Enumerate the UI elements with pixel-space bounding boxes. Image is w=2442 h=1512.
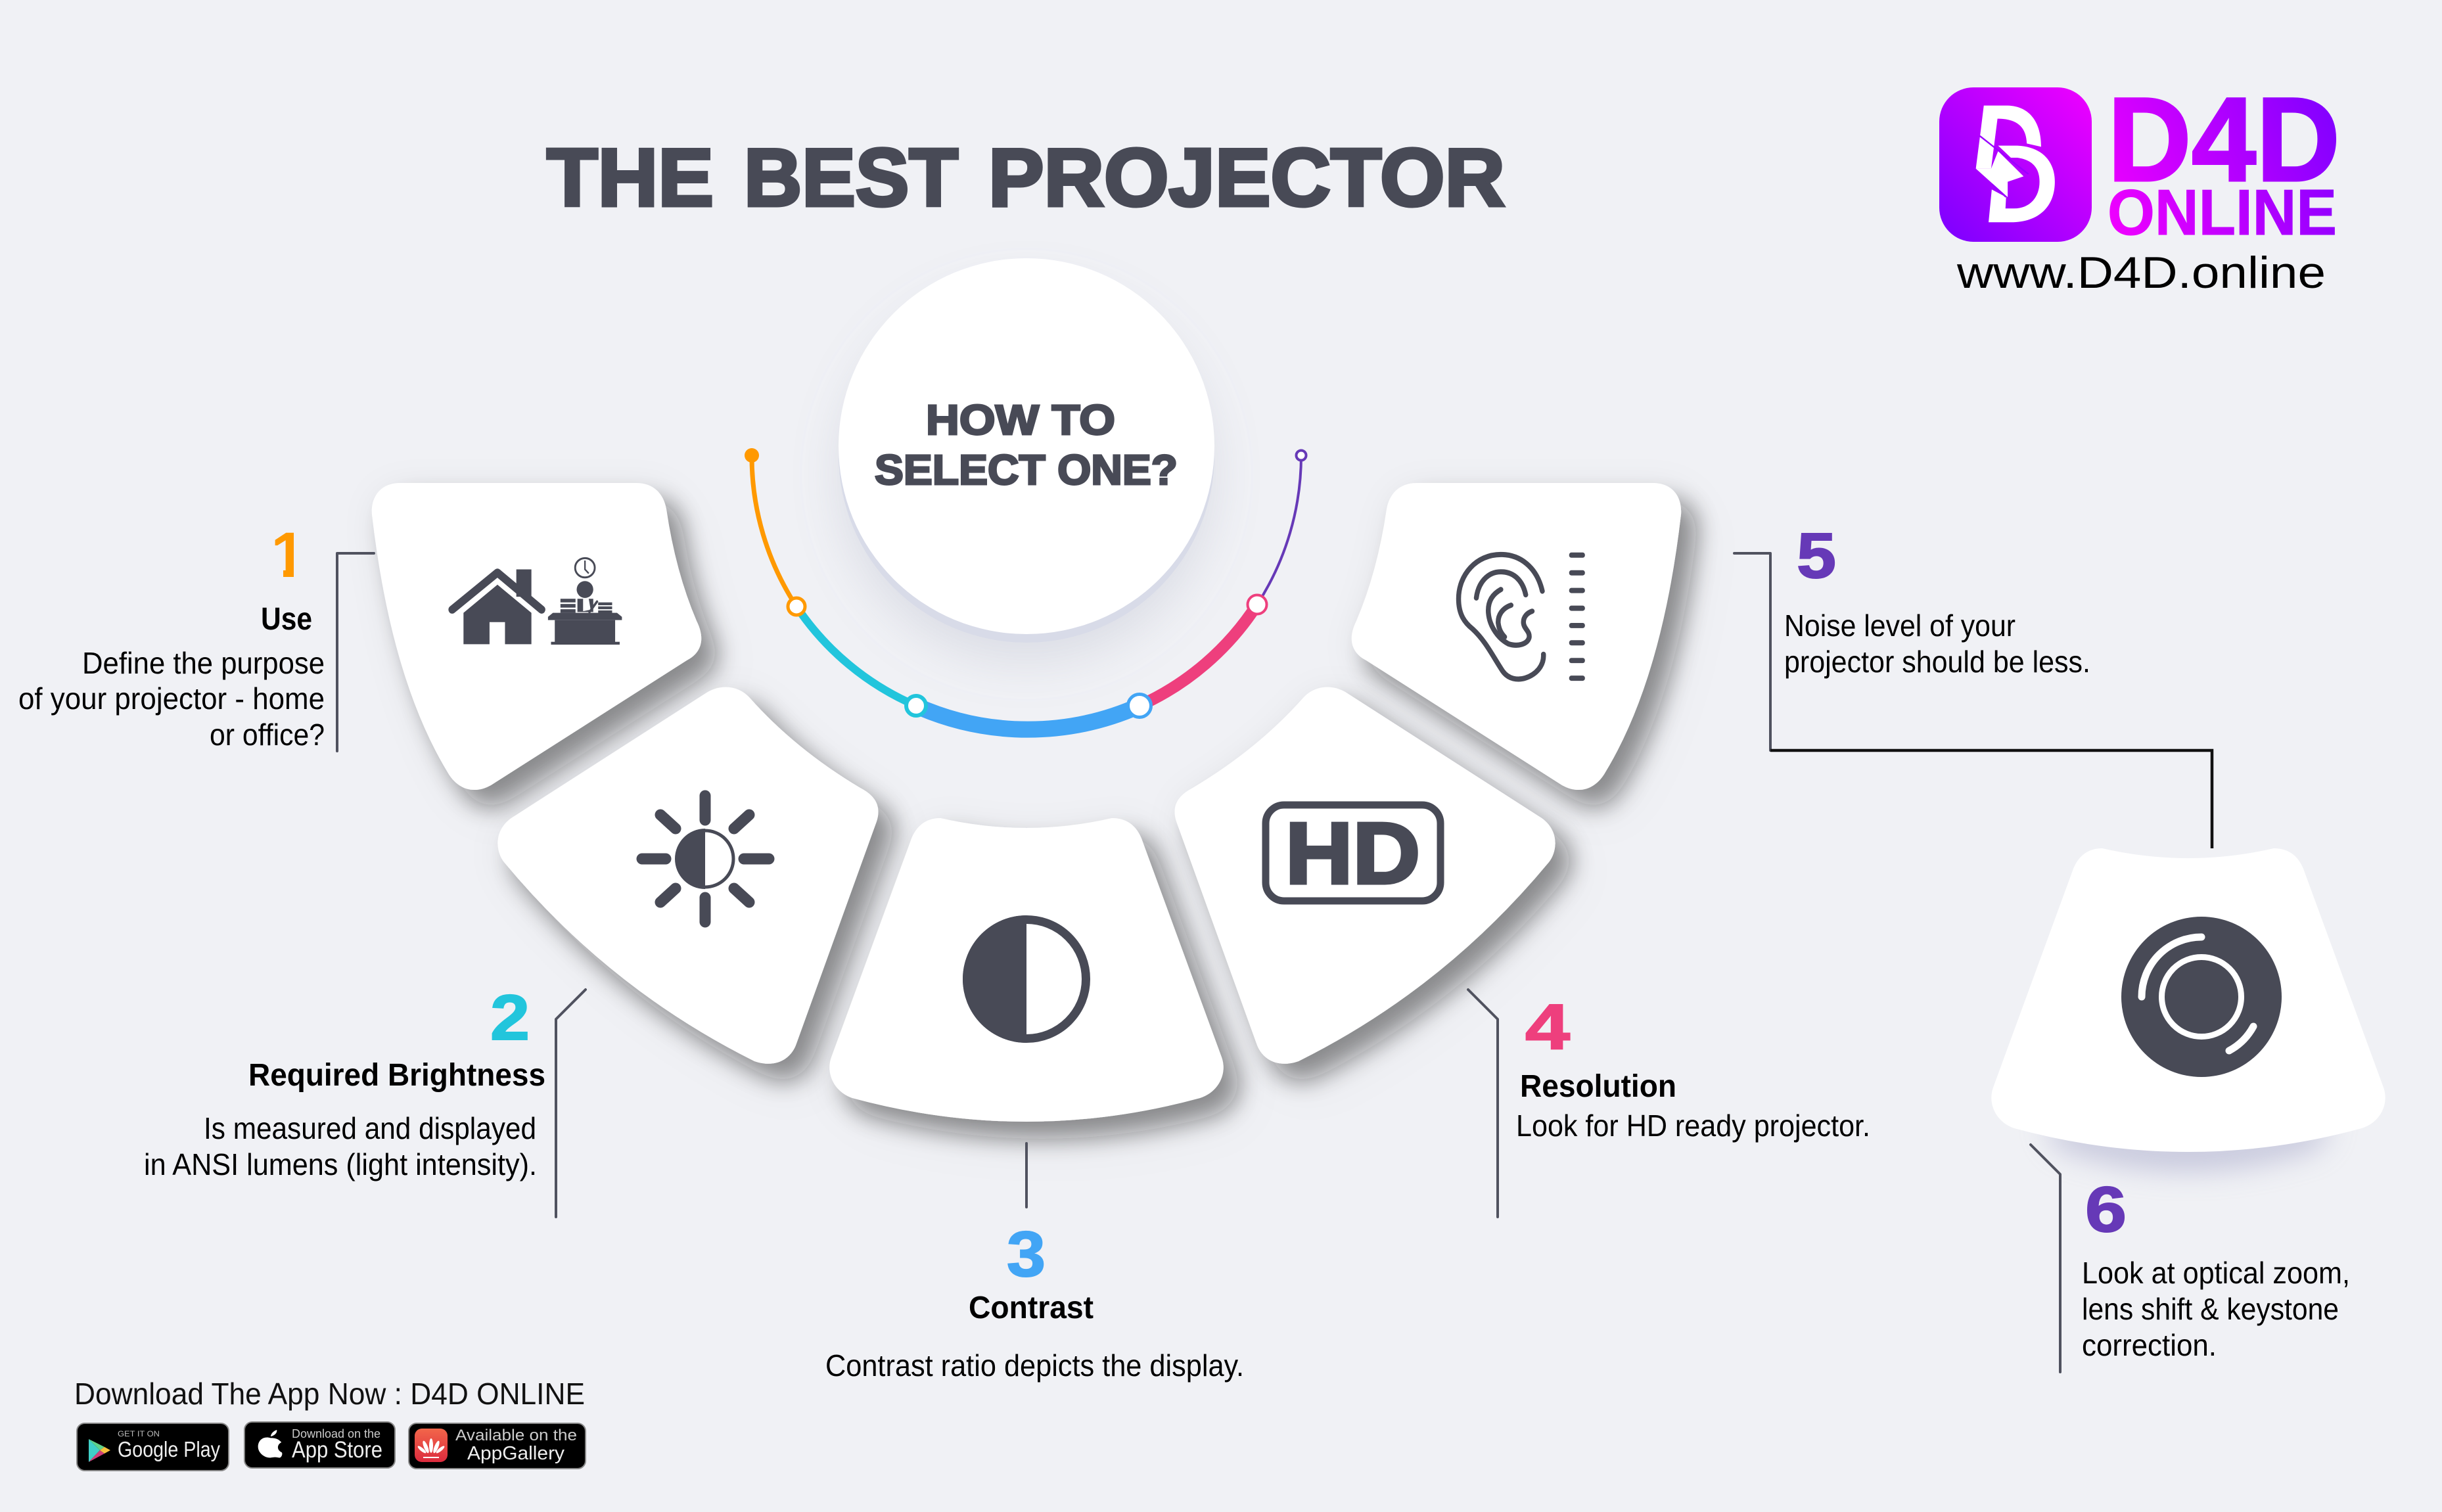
description 5 [1784, 608, 2090, 679]
badge: google play [77, 1423, 229, 1471]
icon: lens [2121, 917, 2282, 1077]
number 4: 4 [1525, 991, 1570, 1063]
icon: ear and level scale [1459, 553, 1585, 681]
description 3: Contrast ratio depicts the display. [825, 1348, 1244, 1383]
badge: app store: App Store [292, 1437, 382, 1463]
number 1: 1 [271, 519, 306, 591]
title [547, 133, 1505, 223]
title: THE [547, 133, 714, 223]
description 6: correction. [2082, 1328, 2217, 1362]
panel: required brightness [497, 687, 878, 1064]
panel: resolution [1175, 687, 1555, 1064]
heading: use: Use [261, 602, 312, 637]
item 5 text [1734, 520, 2212, 848]
icon: HD: HD [1285, 805, 1420, 902]
number 6: 6 [2085, 1174, 2127, 1245]
number 3: 3 [1007, 1218, 1046, 1290]
description 6: Look at optical zoom, [2082, 1256, 2350, 1290]
logo: D4D Online [1939, 72, 2340, 298]
panel: noise level [1352, 483, 1681, 790]
logo wordmark: D4D [2108, 72, 2340, 206]
description 5: Noise level of your [1784, 608, 2016, 643]
number 5: 5 [1797, 520, 1836, 591]
description 4: Look for HD ready projector. [1516, 1109, 1870, 1143]
title: BEST [744, 133, 958, 223]
icon: brightness sun [642, 796, 769, 922]
badge: app store: Download on the [292, 1427, 380, 1440]
item 4 text [1468, 990, 1870, 1217]
connector 6 [2031, 1145, 2060, 1372]
badge: appgallery: AppGallery [467, 1443, 565, 1464]
description 6: lens shift & keystone [2082, 1292, 2339, 1326]
website url: www.D4D.online [1956, 248, 2326, 298]
badge: google play: Google Play [118, 1437, 220, 1461]
title: PROJECTOR [988, 133, 1505, 223]
center circle: how to select one [839, 258, 1214, 643]
badge: app store [244, 1422, 395, 1468]
icon: contrast [963, 915, 1086, 1043]
badge: appgallery: Available on the [455, 1427, 577, 1444]
description 1: or office? [210, 718, 325, 752]
badge: google play: GET IT ON [118, 1429, 160, 1438]
connector 4 [1468, 990, 1498, 1217]
panel: optical zoom [1991, 848, 2385, 1170]
heading: required brightness: Required Brightness [248, 1058, 545, 1093]
heading: how to: HOW TO [926, 396, 1115, 444]
heading: resolution: Resolution [1520, 1069, 1676, 1104]
heading: contrast: Contrast [969, 1291, 1094, 1325]
connector 1 [337, 553, 374, 751]
logo subtitle: ONLINE [2108, 176, 2337, 248]
icon: logo square [1939, 87, 2092, 242]
description 2: Is measured and displayed [204, 1111, 536, 1145]
item 2 text [144, 982, 586, 1217]
number 2: 2 [490, 982, 530, 1053]
description 2: in ANSI lumens (light intensity). [144, 1147, 537, 1181]
description 6 [2082, 1256, 2350, 1362]
description 2 [144, 1111, 537, 1181]
icon: home and office [452, 558, 622, 645]
connector 2 [556, 990, 586, 1217]
description 1 [18, 646, 325, 752]
heading: select one: SELECT ONE? [875, 446, 1178, 493]
arc timeline [745, 448, 1306, 729]
connector 5 [1734, 553, 2212, 848]
panel: use [372, 483, 701, 790]
description 1: of your projector - home [18, 681, 325, 716]
description 5: projector should be less. [1784, 645, 2090, 679]
badge: appgallery [409, 1423, 586, 1469]
description 1: Define the purpose [82, 646, 325, 680]
item 1 text [18, 519, 374, 752]
item 3 text [825, 1143, 1244, 1383]
download call to action: Download The App Now : D4D ONLINE [74, 1377, 585, 1411]
panel: contrast [829, 818, 1224, 1122]
connector 3 [1025, 1143, 1028, 1207]
item 6 text [2031, 1145, 2350, 1372]
